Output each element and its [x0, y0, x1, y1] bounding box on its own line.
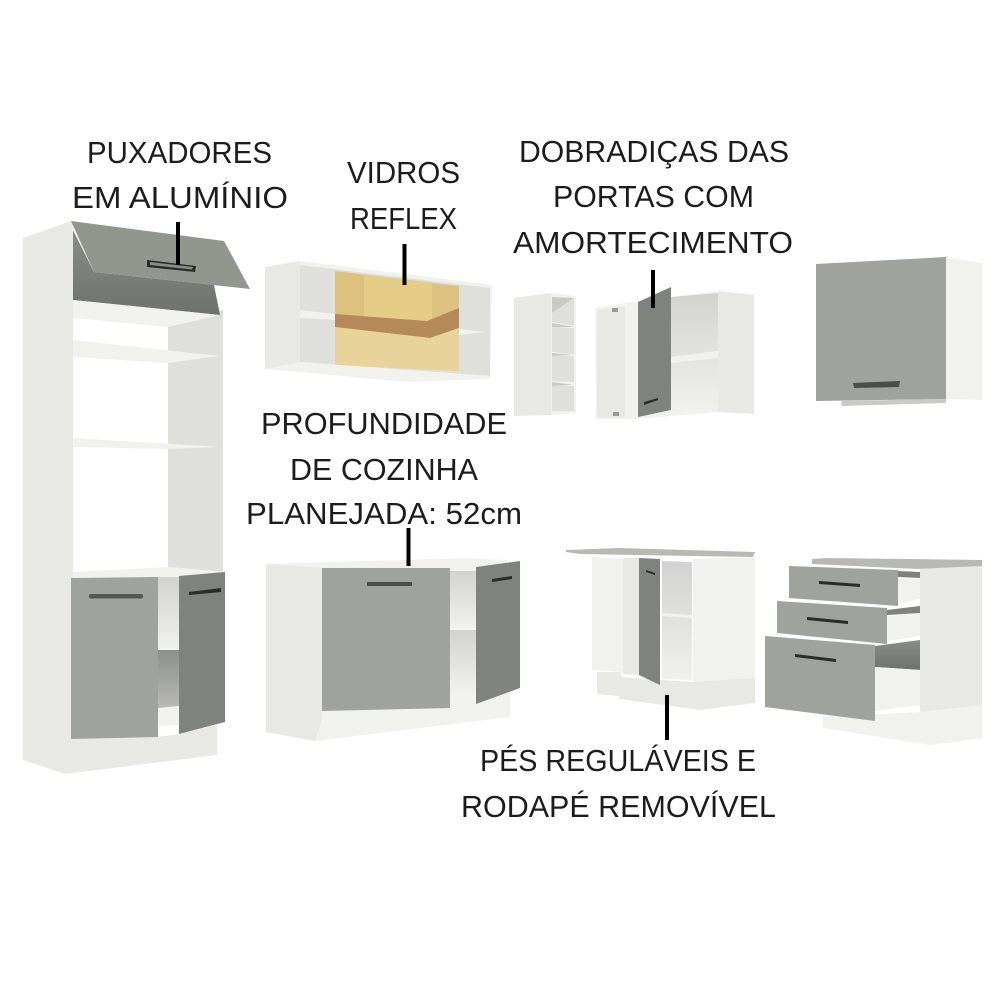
lower left door	[71, 577, 158, 739]
base cabinet with two doors	[266, 558, 520, 741]
left handle	[367, 582, 412, 586]
bottom drawer	[765, 636, 875, 721]
arrow: depth leader	[406, 528, 410, 566]
flap handle	[147, 260, 196, 272]
label: profundidade: PLANEJADA: 52cm	[246, 496, 522, 531]
label: dobradiças: DOBRADIÇAS DAS	[519, 134, 789, 169]
open door	[638, 287, 671, 417]
label: puxadores: EM ALUMÍNIO	[72, 180, 288, 215]
arrow: glass leader	[402, 244, 406, 285]
lower left handle	[89, 594, 143, 598]
label: dobradiças: PORTAS COM	[553, 179, 754, 214]
reflex glass	[335, 271, 459, 371]
middle drawer handle	[807, 617, 848, 624]
label: vidros reflex	[347, 155, 460, 236]
corner base cabinet	[566, 548, 755, 710]
narrow open shelf cabinet	[514, 293, 576, 416]
label: pés reguláveis	[461, 743, 776, 824]
arrow: feet leader	[665, 695, 669, 740]
countertop	[812, 558, 982, 569]
upper right wall cabinet	[816, 257, 982, 406]
door handle	[646, 570, 655, 575]
cabinet underside	[265, 362, 490, 382]
label: vidros reflex: REFLEX	[350, 201, 457, 236]
drawer base cabinet	[765, 558, 982, 745]
label: pés reguláveis: PÉS REGULÁVEIS E	[480, 743, 756, 778]
countertop	[566, 548, 755, 557]
label: puxadores	[72, 135, 288, 215]
door	[816, 257, 946, 401]
corner wall cabinet	[595, 287, 754, 419]
arrow: handles leader	[176, 222, 180, 265]
top drawer handle	[819, 581, 860, 587]
label: profundidade	[246, 406, 522, 531]
glass reflection band	[335, 308, 459, 338]
label: pés reguláveis: RODAPÉ REMOVÍVEL	[461, 789, 776, 824]
arrow: hinge leader	[651, 270, 655, 308]
door handle	[644, 398, 658, 405]
label: puxadores: PUXADORES	[87, 135, 272, 170]
label: dobradiças	[513, 134, 793, 260]
lower right door	[179, 572, 225, 734]
label: profundidade: PROFUNDIDADE	[261, 406, 507, 441]
flap door	[71, 221, 250, 289]
middle drawer	[777, 601, 887, 644]
handle	[853, 381, 900, 388]
open door	[639, 558, 660, 685]
left door	[322, 568, 450, 711]
label: profundidade: DE COZINHA	[290, 452, 478, 487]
lower right handle	[189, 588, 221, 595]
hinge	[613, 412, 619, 416]
hinge	[612, 308, 618, 312]
label: vidros reflex: VIDROS	[347, 155, 460, 190]
glass wall cabinet	[265, 261, 492, 382]
tall oven cabinet	[23, 221, 250, 774]
top drawer	[789, 566, 898, 606]
right door	[476, 561, 520, 704]
label: dobradiças: AMORTECIMENTO	[513, 225, 793, 260]
right handle	[492, 576, 512, 582]
bottom drawer handle	[795, 654, 836, 662]
